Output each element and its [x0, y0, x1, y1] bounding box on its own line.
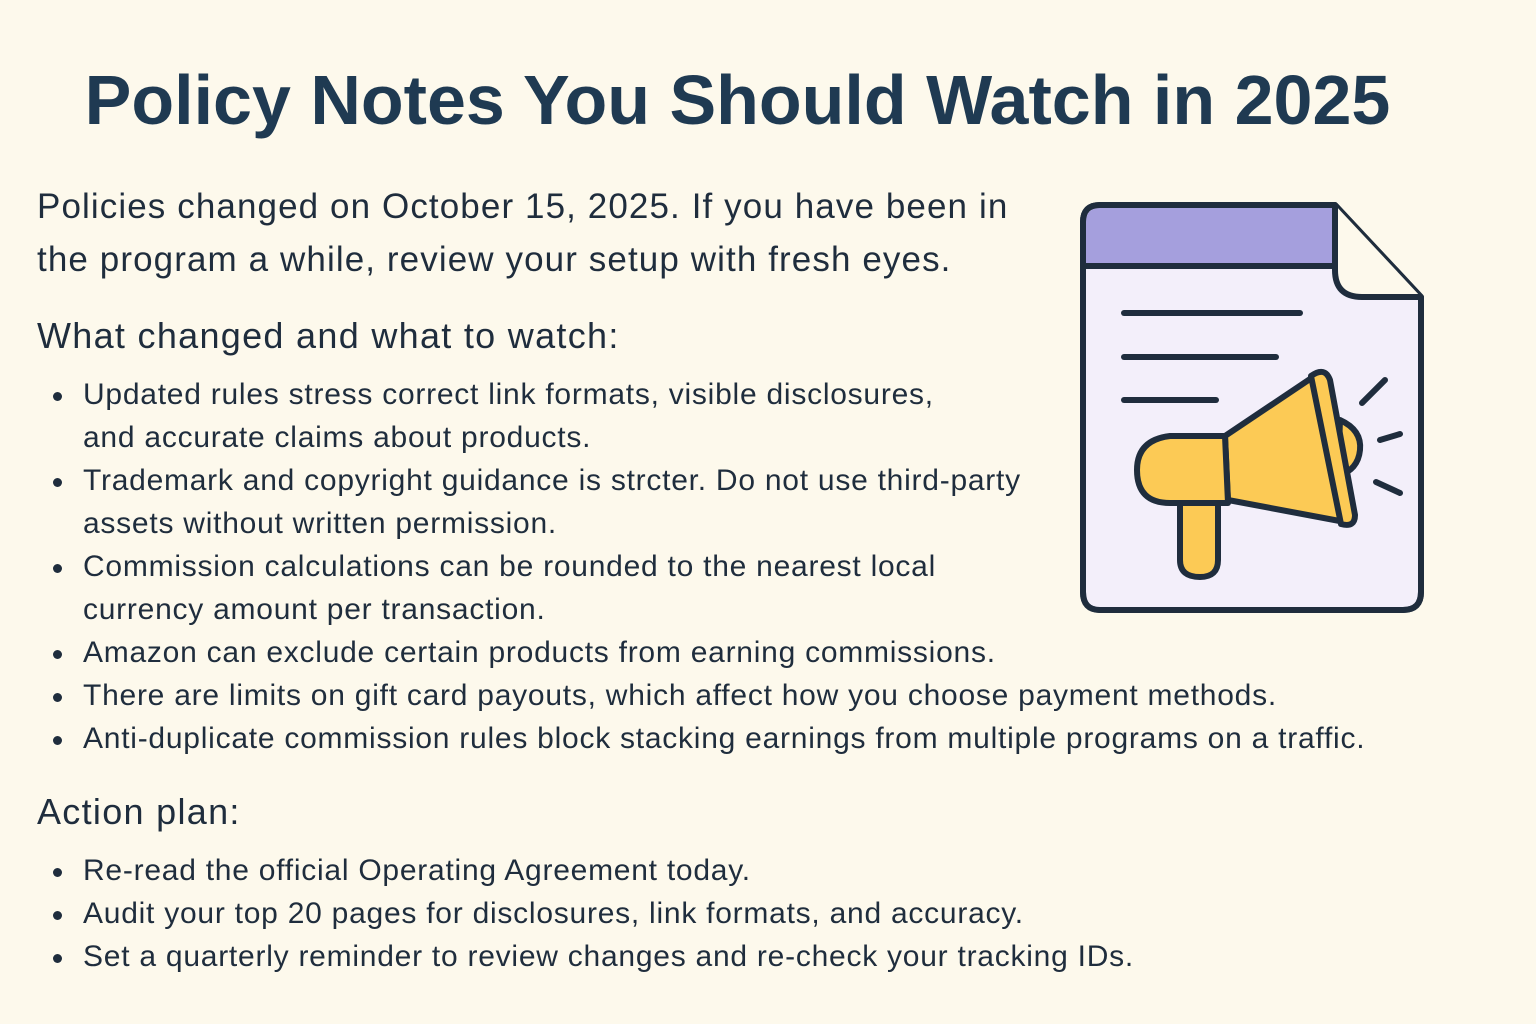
list: changes: Amazon can exclude certain products from earning commissions. — [83, 636, 996, 669]
list: action plan: Set a quarterly reminder to review changes and re-check your tracking IDs. — [83, 940, 1134, 973]
list: changes: Anti-duplicate commission rules block stacking earnings from multiple programs on a traffic. — [83, 722, 1365, 755]
list: changes: Commission calculations can be rounded to the nearest local — [83, 550, 936, 583]
title: Policy Notes You Should Watch in 2025 — [85, 61, 1390, 139]
heading: what changed: What changed and what to watch: — [37, 315, 620, 356]
list: changes: assets without written permission. — [83, 507, 557, 540]
list: action plan — [53, 854, 1134, 973]
heading: action plan: Action plan: — [37, 791, 241, 832]
intro text: Policies changed on October 15, 2025. If you have been in — [37, 187, 1008, 226]
list: changes: Trademark and copyright guidance is strcter. Do not use third-party — [83, 464, 1021, 497]
list: changes: There are limits on gift card payouts, which affect how you choose payment methods. — [83, 679, 1277, 712]
list: changes: Updated rules stress correct link formats, visible disclosures, — [83, 378, 934, 411]
icon: document with megaphone — [1080, 202, 1424, 613]
list: changes: currency amount per transaction. — [83, 593, 546, 626]
list: action plan: Audit your top 20 pages for disclosures, link formats, and accuracy. — [83, 897, 1024, 930]
list: changes: and accurate claims about products. — [83, 421, 591, 454]
intro text — [37, 187, 1008, 279]
list: action plan: Re-read the official Operating Agreement today. — [83, 854, 751, 887]
intro text: the program a while, review your setup with fresh eyes. — [37, 240, 952, 279]
list: changes — [53, 378, 1365, 755]
